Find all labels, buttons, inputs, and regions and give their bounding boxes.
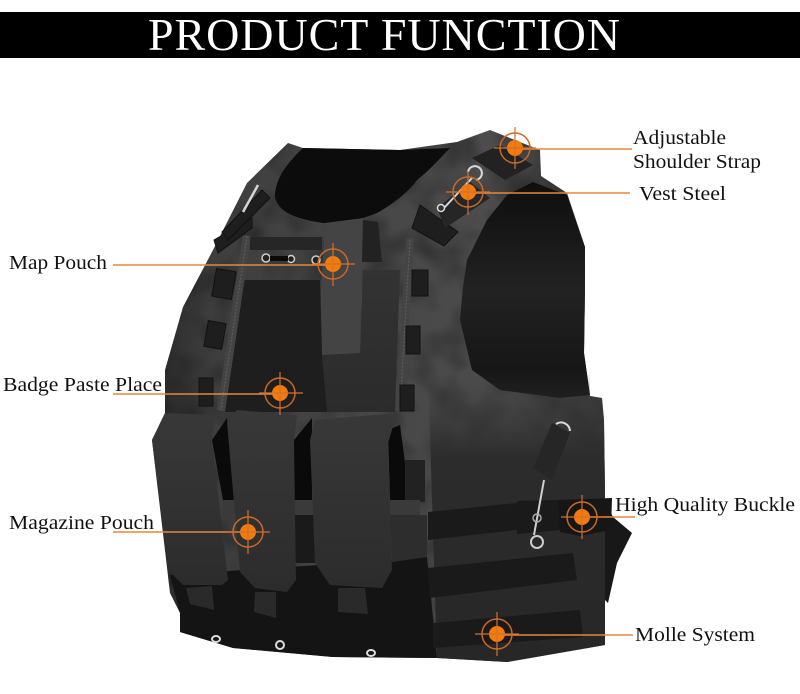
side straps — [428, 500, 583, 648]
callout: badge paste place — [3, 372, 303, 415]
lower side panel — [428, 370, 605, 662]
armhole lining — [460, 182, 590, 398]
callout: high quality buckle — [561, 494, 795, 539]
left shoulder clip — [243, 185, 258, 212]
side carabiner — [531, 422, 570, 548]
callout: molle system — [475, 612, 755, 656]
callout: map pouch — [9, 243, 355, 286]
buckle — [558, 498, 612, 536]
magazine clip tab — [405, 460, 425, 502]
panel seams — [217, 235, 414, 412]
callout: vest steel — [446, 171, 726, 215]
callout: high quality buckle: High Quality Buckle — [615, 494, 795, 516]
callout: adjustable shoulder strap: Adjustable — [633, 127, 726, 149]
title banner — [0, 9, 800, 60]
vest body — [152, 130, 605, 662]
callout: vest steel: Vest Steel — [639, 183, 726, 205]
callout: badge paste place: Badge Paste Place — [3, 374, 162, 396]
velcro panel — [223, 280, 328, 412]
callout: adjustable shoulder strap — [494, 127, 761, 173]
molle loops — [199, 190, 458, 411]
pouch band — [222, 500, 427, 563]
callout: adjustable shoulder strap: Shoulder Strap — [633, 151, 761, 173]
lower pouch bags — [170, 557, 437, 658]
callout: magazine pouch: Magazine Pouch — [9, 512, 154, 534]
callout: map pouch: Map Pouch — [9, 252, 107, 274]
grommets — [262, 254, 320, 264]
map pocket — [322, 270, 400, 412]
fabric mottling — [152, 130, 605, 662]
shoulder straps — [437, 145, 533, 228]
chest webbing — [250, 237, 322, 250]
neck opening — [275, 148, 450, 223]
magazines behind pouches — [212, 418, 410, 503]
callout: molle system: Molle System — [635, 624, 755, 646]
side flap — [605, 500, 632, 603]
callout: magazine pouch — [9, 510, 270, 554]
pouch flap 3 — [310, 413, 397, 588]
pouch flap 2 — [227, 410, 297, 592]
tactical vest illustration — [152, 130, 632, 662]
pouch tabs — [186, 586, 368, 618]
pouch eyelets — [212, 636, 375, 656]
title banner: PRODUCT FUNCTION — [148, 9, 620, 60]
map pouch strap — [321, 218, 363, 355]
pouch flap 1 — [152, 413, 228, 585]
